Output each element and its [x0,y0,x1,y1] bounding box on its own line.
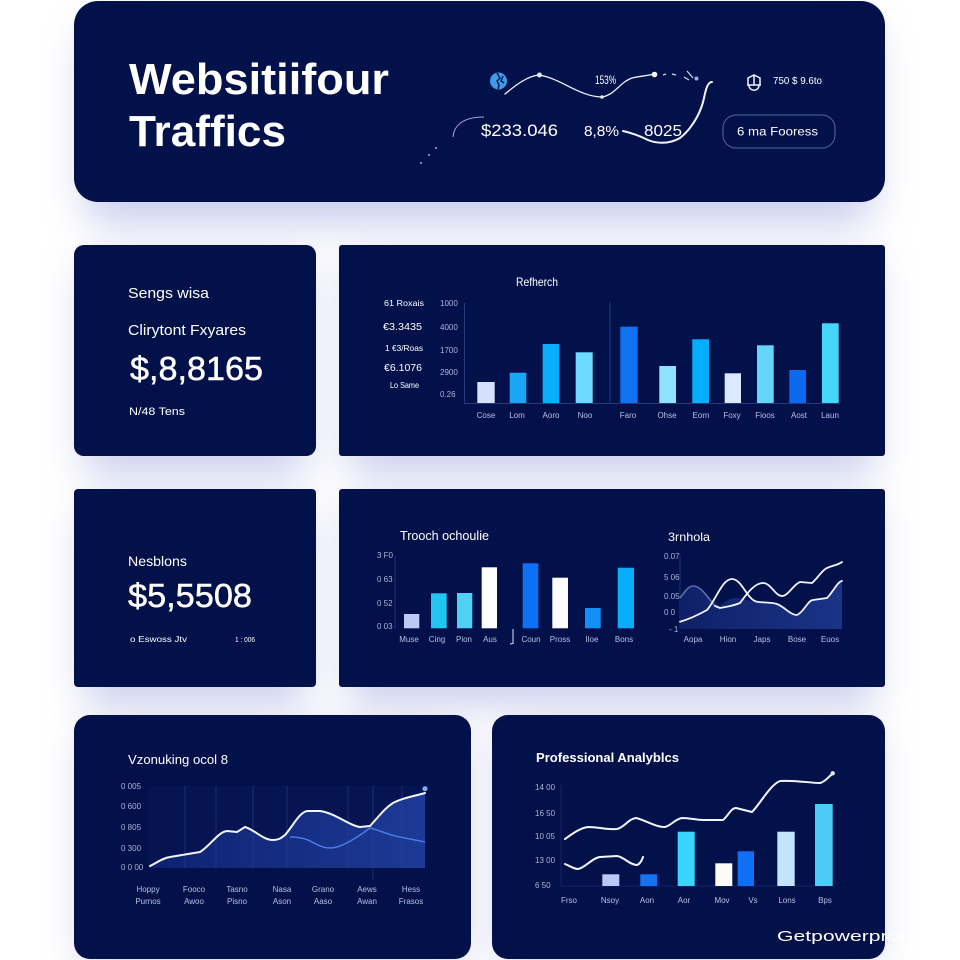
panel: header [74,1,885,202]
x labels: Foxy [723,411,741,420]
x labels: Nsoy [601,896,619,905]
x labels: Fooco [183,885,206,894]
x labels: Cose [477,411,496,420]
x labels: Nasa [273,885,292,894]
trend lines [565,771,835,869]
x labels: Noo [578,411,593,420]
x labels: Grano [312,885,335,894]
x labels: Aaso [314,897,333,906]
watermark: Getpowerprom [777,929,917,945]
panel: area chart [74,715,471,959]
x labels: Ohse [657,411,677,420]
area chart [148,786,428,880]
stat note: N/48 Tens [129,406,186,418]
y axis: 1000 [440,299,458,308]
x labels: Awan [357,897,377,906]
x labels: bars: Aus [483,635,497,644]
side labels: Lo Same [390,381,419,390]
x labels: Hoppy [136,885,160,894]
y axis [121,782,144,872]
x labels: Mov [714,896,730,905]
y axis: 1700 [440,346,458,355]
chart heading: lines: 3rnhola [668,530,710,544]
y axis [535,783,834,890]
y axis: lines: 5 06 [664,573,680,582]
x labels: Bps [818,896,832,905]
stat heading: Sengs wisa [128,286,210,302]
y axis: lines [664,552,680,634]
y axis: lines: 0 0 [664,608,676,617]
bars [477,323,839,403]
x labels: Aoro [543,411,560,420]
line chart [680,562,842,629]
side labels: €6.1076 [384,363,422,374]
x labels: Faro [620,411,637,420]
x labels: lines: Euos [821,635,839,644]
x labels: Frasos [399,897,423,906]
x labels: Aor [678,896,691,905]
x labels: Frso [561,896,578,905]
header trend line [505,71,698,99]
y axis: 0 805 [121,823,142,832]
y axis: 14 00 [535,783,556,792]
stat subheading: Clirytont Fxyares [128,322,246,339]
x labels: Purnos [135,897,161,906]
x labels: Tasno [226,885,248,894]
x labels: lines: Bose [788,635,807,644]
chart heading: bars: Trooch ochoulie [400,529,489,543]
y axis: bars: 0 63 [377,575,393,584]
header stat: top right: 750 $ 9.6to [773,75,822,87]
stat note: o Eswoss Jtv [130,634,188,644]
x labels: lines [684,635,839,644]
x labels: Laun [821,411,839,420]
x labels: bars: Pion [456,635,472,644]
x labels [135,885,423,906]
x labels: lines: Hion [720,635,736,644]
x labels: Ason [273,897,291,906]
header large curve [623,82,712,143]
y axis: bars: 0 03 [377,622,393,631]
panel: stat two [74,489,316,687]
stat note [130,634,255,644]
y axis: 13 00 [535,856,556,865]
stat heading: Nesblons [128,554,187,569]
y axis: lines: - 1 [669,625,679,634]
chart heading: Refherch [516,275,558,289]
header stat: revenue: $233.046 [481,121,558,140]
x labels: Vs [748,896,758,905]
x labels: Hess [402,885,420,894]
y axis: 16 50 [535,809,556,818]
icon: building [747,75,761,90]
stat value: $,8,8165 [130,350,263,387]
x labels: lines: Japs [754,635,770,644]
panel: stat one [74,245,316,456]
chart heading: Vzonuking ocol 8 [128,752,228,767]
x labels: Awoo [184,897,204,906]
side labels [383,298,424,390]
header stat: percent: 153% [595,75,616,87]
x labels: bars: Iloe [586,635,599,644]
y axis: 0.26 [440,390,456,399]
y axis: bars: 0 52 [377,599,393,608]
x labels: Eorn [693,411,709,420]
y axis [440,299,840,404]
header stat: count: 8025 [644,123,682,140]
y axis: 0 600 [121,802,142,811]
bars [602,804,833,886]
panel: professional analytics [492,715,917,959]
stat note: 1 : 006 [235,637,255,644]
x labels: bars: Cing [429,635,445,644]
panel: bar chart refherch [339,245,885,456]
x labels: lines: Aopa [684,635,703,644]
x labels: Pisno [227,897,248,906]
chart heading: Professional Analyblcs [536,750,679,765]
side labels: 61 Roxais [384,298,424,308]
title [129,55,389,156]
title: Websitiifour [129,55,389,104]
x labels: bars [399,635,633,644]
button: 6 ma Fooress [737,124,818,138]
y axis: 0 300 [121,844,142,853]
x labels: bars: Pross [550,635,570,644]
y axis: lines: 0.05 [664,592,680,601]
header small arc [420,117,484,164]
x labels: Fioos [755,411,775,420]
x labels [561,896,832,905]
x labels: Aon [640,896,654,905]
x labels: bars: Bons [615,635,633,644]
y axis: 6 50 [535,881,551,890]
x labels: bars: Coun [521,635,541,644]
y axis: lines: 0.07 [664,552,680,561]
bars [404,563,634,644]
x labels: Aews [357,885,377,894]
header stat: rate: 8,8% [584,123,619,140]
side labels: 1 €3/Roas [385,343,423,353]
x labels: Lom [509,411,525,420]
y axis: bars: 3 F0 [377,551,394,560]
y axis: 10 05 [535,832,556,841]
title: Traffics [129,107,286,156]
x labels: bars: Muse [399,635,419,644]
stat value: $5,5508 [128,577,252,614]
x labels [477,411,839,420]
x labels: Aost [791,411,808,420]
side labels: €3.3435 [383,322,422,333]
y axis: 0 005 [121,782,142,791]
y axis: 2900 [440,368,458,377]
y axis: 4000 [440,323,458,332]
button [723,115,835,148]
y axis: bars [377,551,395,631]
icon: globe [490,72,507,90]
x labels: Lons [778,896,796,905]
panel: dual charts [339,489,885,687]
y axis: 0 0 00 [121,863,144,872]
